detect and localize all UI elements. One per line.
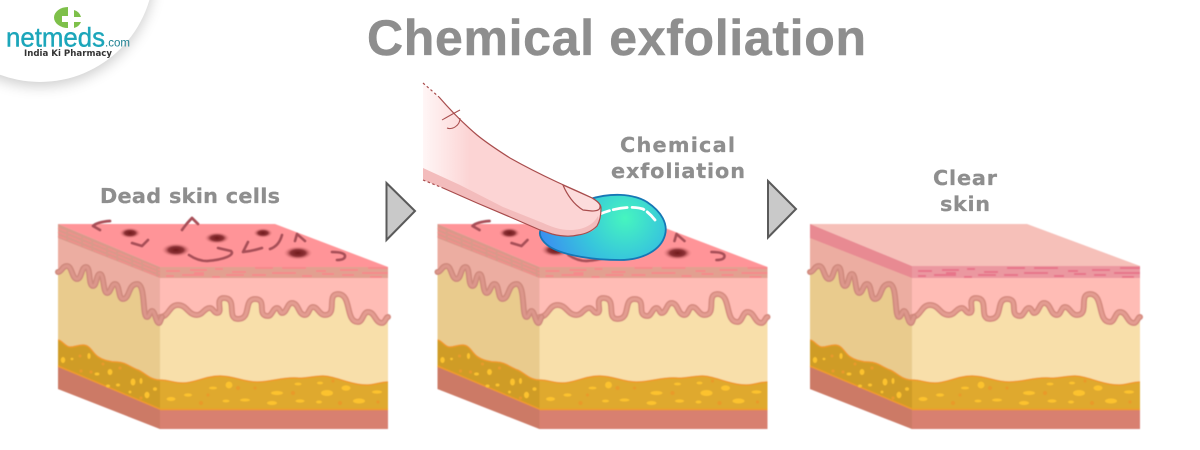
finger body	[423, 83, 601, 236]
fingernail	[563, 185, 600, 211]
skin block: dead skin cells	[58, 218, 388, 429]
logo domain: .com	[105, 36, 130, 50]
label: clear skin: skin	[940, 192, 990, 216]
logo tagline: India Ki Pharmacy	[24, 49, 112, 59]
label: chemical exfoliation	[611, 133, 745, 183]
arrow: step two to three	[768, 181, 796, 238]
icon: exfoliant gel drop	[540, 195, 666, 260]
icon: green plus	[54, 7, 81, 28]
label: clear skin	[933, 166, 998, 216]
finger side shadow	[423, 168, 599, 236]
label: chemical exfoliation: exfoliation	[611, 159, 745, 183]
label: chemical exfoliation: Chemical	[620, 133, 735, 157]
icon: finger	[423, 83, 601, 236]
label: dead skin cells: Dead skin cells	[100, 184, 280, 208]
gel highlight	[600, 207, 655, 220]
label: clear skin: Clear	[933, 166, 998, 190]
knuckle crease	[442, 110, 460, 129]
logo badge	[0, 0, 154, 86]
logo wordmark: netmeds	[6, 22, 105, 52]
title: Chemical exfoliation	[367, 10, 866, 66]
finger outline	[439, 97, 601, 236]
arrow: step one to two	[386, 183, 415, 240]
skin block: chemical exfoliation	[438, 218, 768, 429]
skin block: clear skin	[810, 224, 1140, 429]
